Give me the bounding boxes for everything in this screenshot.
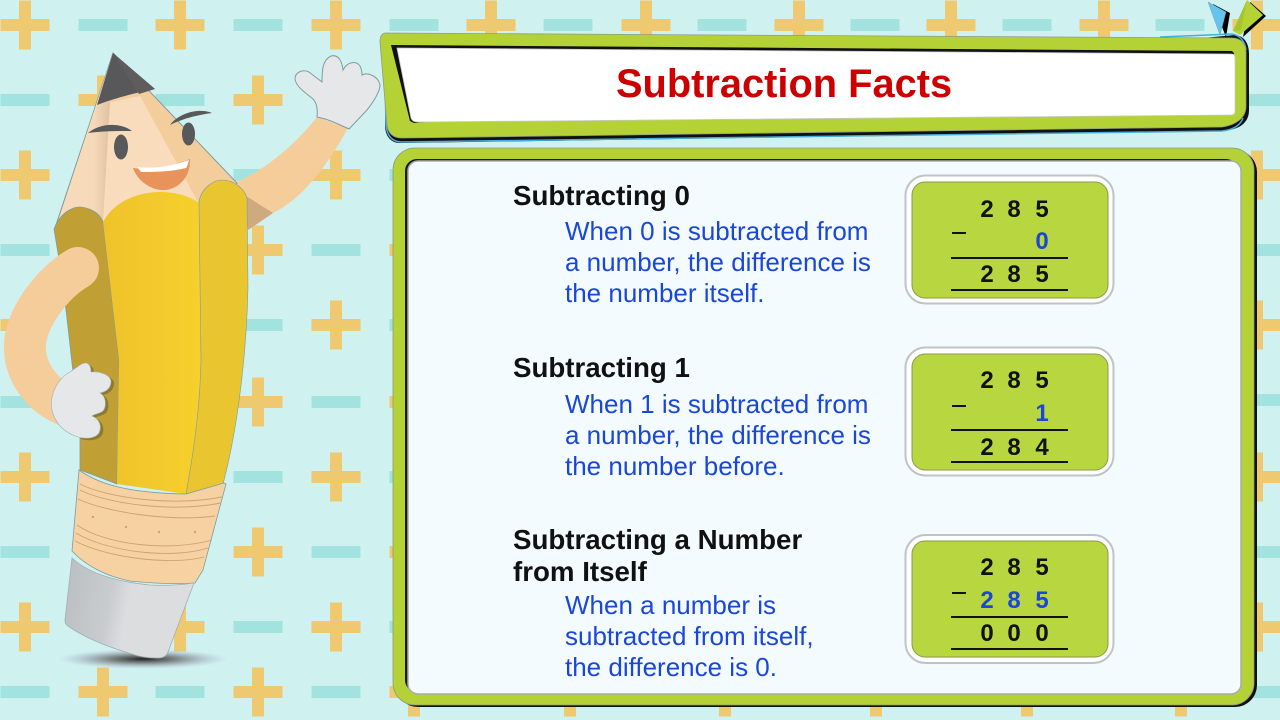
- title banner: [380, 0, 1266, 143]
- math card 3: [906, 535, 1114, 663]
- content panel frame: [393, 148, 1257, 707]
- math card 3: 5: [1035, 587, 1049, 614]
- text: subtracting a number from itself rule: the difference is 0.: [565, 652, 777, 682]
- math card 1: 8: [1007, 261, 1021, 288]
- mouth: [133, 159, 190, 190]
- banner white interior: [397, 48, 1235, 122]
- math card 1: 8: [1007, 196, 1021, 223]
- ferrule band: [72, 470, 226, 584]
- math card 1: 0: [1035, 228, 1049, 255]
- text: subtracting 1 rule: When 1 is subtracted from: [565, 389, 868, 419]
- panel shadow: [396, 150, 1257, 707]
- banner green frame: [380, 33, 1246, 138]
- center body panel: [103, 192, 201, 494]
- text: subtracting 1 rule: the number before.: [565, 451, 785, 481]
- heading: subtracting 0: Subtracting 0: [513, 180, 690, 211]
- text: subtracting 0 rule: the number itself.: [565, 278, 764, 308]
- left arm: [25, 268, 78, 406]
- math card 3: 0: [1007, 620, 1021, 647]
- head light facet: [56, 56, 198, 228]
- math card 3: 5: [1035, 554, 1049, 581]
- math card 1: 5: [1035, 196, 1049, 223]
- panel interior: [408, 161, 1241, 694]
- math card 2: 2: [980, 434, 994, 461]
- eraser: [65, 558, 194, 658]
- math card 1: 5: [1035, 261, 1049, 288]
- math card 3: 2: [980, 587, 994, 614]
- math card 1: 2: [980, 261, 994, 288]
- text: subtracting 0 rule: [565, 216, 871, 308]
- math card 2: 4: [1035, 434, 1049, 461]
- panel green frame: [393, 148, 1254, 705]
- raised arm: [235, 117, 348, 230]
- heading: subtracting 1: Subtracting 1: [513, 352, 690, 383]
- text: subtracting 0 rule: When 0 is subtracted from: [565, 216, 868, 246]
- math card 3: 0: [1035, 620, 1049, 647]
- banner shadow: [385, 35, 1249, 143]
- math card 3: 2: [980, 554, 994, 581]
- right body panel: [186, 180, 248, 494]
- eyebrow left: [88, 125, 132, 133]
- pencil character: [25, 53, 380, 669]
- math card 2: 8: [1007, 434, 1021, 461]
- text: subtracting 1 rule: [565, 389, 871, 481]
- panel inner edge: [405, 159, 1238, 692]
- icon: glove on hip: [51, 363, 114, 440]
- math card 1: [906, 176, 1114, 304]
- text: subtracting a number from itself rule: When a number is: [565, 590, 776, 620]
- math card 3: 0: [980, 620, 994, 647]
- head wood: [55, 53, 237, 228]
- text: subtracting a number from itself rule: subtracted from itself,: [565, 621, 814, 651]
- eye right: [182, 122, 195, 146]
- left body panel: [54, 207, 119, 484]
- text: subtracting 0 rule: a number, the difference is: [565, 247, 871, 277]
- heading: subtracting a number from itself: [513, 524, 802, 587]
- heading: subtracting a number from itself: from Itself: [513, 556, 647, 587]
- banner inner edge: [391, 45, 1234, 123]
- pencil body: [54, 180, 248, 494]
- title: Subtraction Facts: [616, 62, 952, 106]
- banner ornament: blue triangle: [1208, 2, 1230, 37]
- math card 2: 8: [1007, 367, 1021, 394]
- math card 2: 1: [1035, 400, 1049, 427]
- banner blue edge: [385, 34, 1246, 142]
- icon: waving glove: [295, 56, 380, 129]
- banner ornament: green triangle: [1233, 0, 1266, 37]
- text: subtracting a number from itself rule: [565, 590, 814, 682]
- head shaded sliver: [56, 102, 110, 228]
- ground shadow: [57, 649, 229, 669]
- pencil lead tip: [97, 53, 155, 105]
- text: subtracting 1 rule: a number, the difference is: [565, 420, 871, 450]
- math card 3: 8: [1007, 554, 1021, 581]
- math card 2: [906, 348, 1114, 476]
- math card 2: 5: [1035, 367, 1049, 394]
- eye left: [114, 134, 128, 160]
- math card 3: 8: [1007, 587, 1021, 614]
- math card 1: 2: [980, 196, 994, 223]
- heading: subtracting a number from itself: Subtracting a Number: [513, 524, 802, 555]
- eyebrow right: [170, 111, 212, 125]
- math card 2: 2: [980, 367, 994, 394]
